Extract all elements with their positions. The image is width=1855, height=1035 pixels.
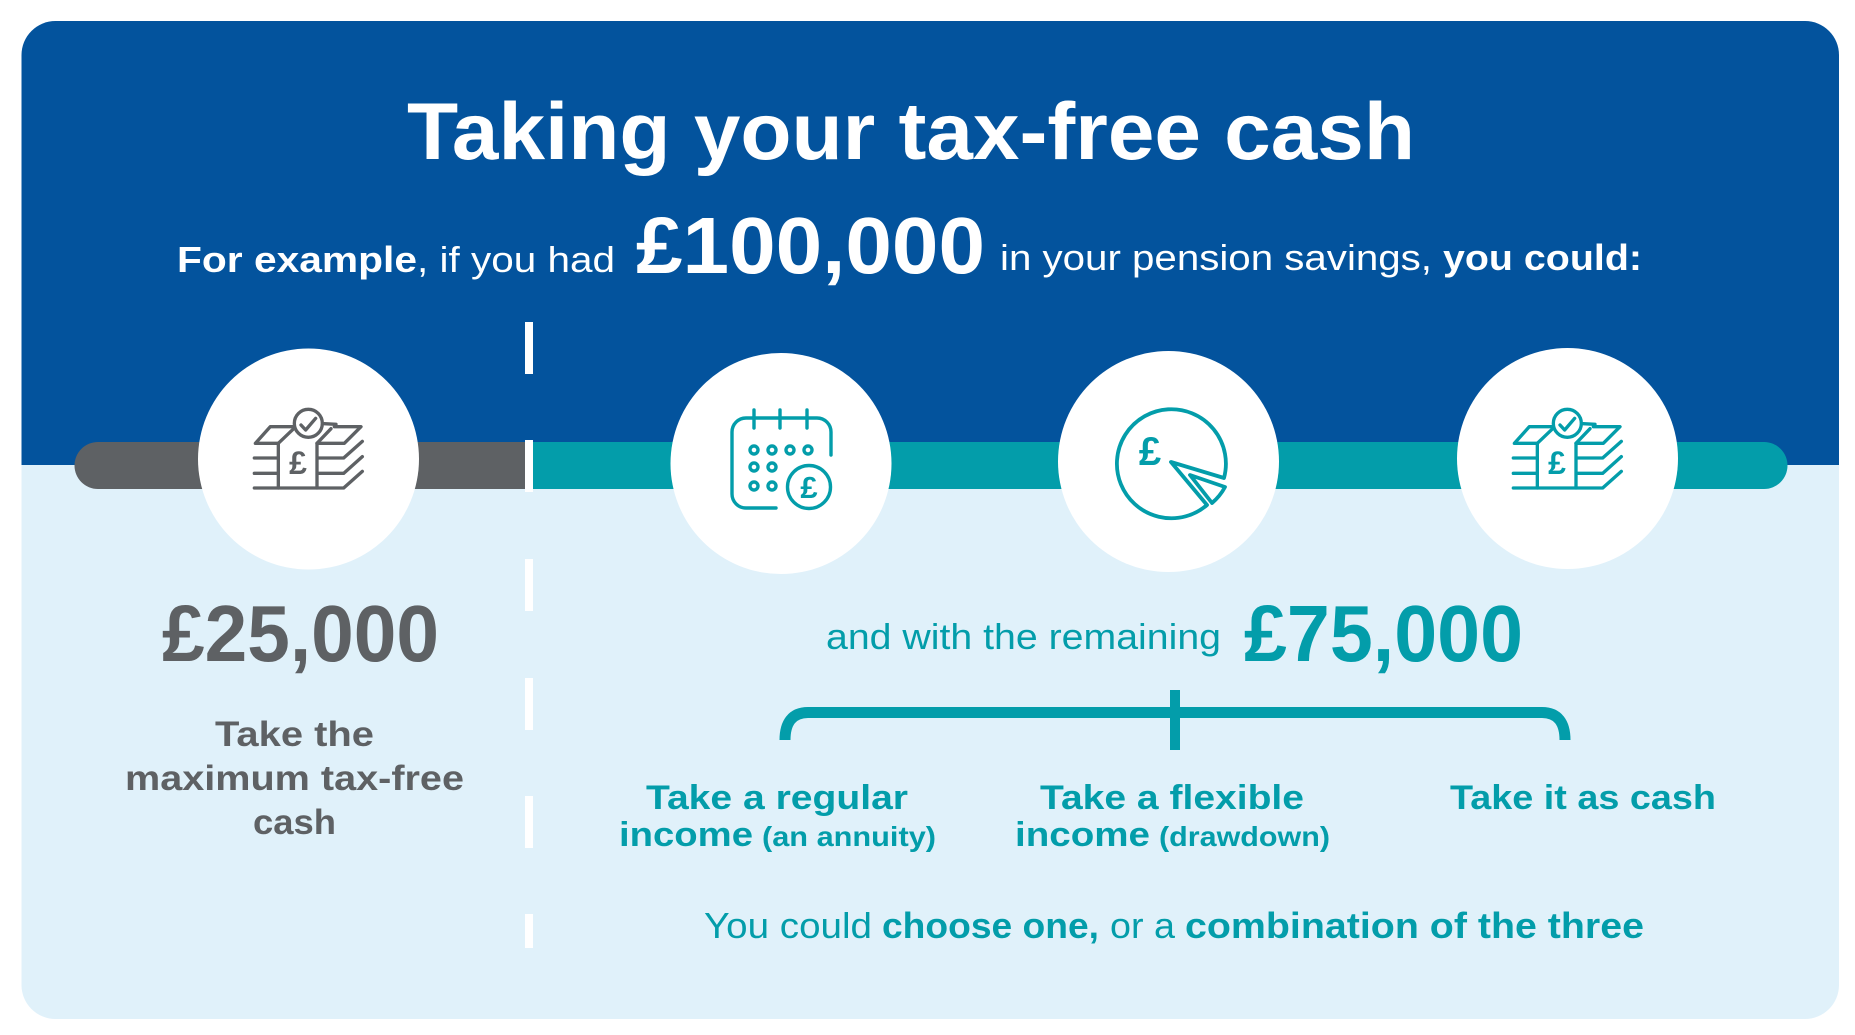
bar: tax-free portion [74, 442, 525, 489]
title: Taking your tax-free cash [407, 87, 1415, 177]
text: take the maximum tax-free cash: maximum tax-free [125, 759, 464, 798]
circle: tax-free cash [198, 348, 419, 570]
text: combination note: or a [1110, 905, 1176, 946]
icon: open box of cash, teal: £ [1548, 445, 1566, 481]
option: regular income [619, 779, 936, 854]
icon: pie chart with pound sign [1117, 409, 1226, 518]
icon: pie chart with pound sign: £ [1139, 430, 1161, 474]
option: regular income: income [619, 816, 753, 854]
text: combination note: You could [704, 905, 872, 946]
text: remaining amount: and with the remaining [826, 616, 1221, 657]
circle: regular income [670, 353, 892, 574]
icon: open box of cash, grey [254, 409, 362, 488]
circle: take as cash [1457, 348, 1678, 569]
subtitle: pension example: £100,000 [636, 201, 985, 290]
icon: open box of cash, grey: £ [289, 445, 307, 481]
option: flexible income: (drawdown) [1159, 821, 1330, 852]
subtitle: pension example: you could: [1443, 237, 1642, 278]
text: take the maximum tax-free cash: Take the [215, 715, 374, 754]
bar: remaining portion [533, 442, 1788, 489]
subtitle: pension example [177, 201, 1642, 290]
text: combination note: combination of the three [1185, 905, 1644, 946]
text: take the maximum tax-free cash: cash [253, 803, 336, 842]
option: take as cash: Take it as cash [1450, 779, 1716, 817]
subtitle: pension example: , if you had [417, 239, 615, 280]
option: flexible income [1015, 779, 1330, 854]
subtitle: pension example: For example [177, 239, 417, 280]
icon: open box of cash, teal [1513, 409, 1621, 488]
bracket [785, 690, 1565, 750]
text: remaining amount [826, 589, 1523, 678]
option: regular income: (an annuity) [762, 821, 936, 852]
amount: £25,000: £25,000 [162, 589, 439, 678]
text: combination note [704, 905, 1644, 946]
icon: calendar with pound coin: £ [800, 470, 818, 505]
dashed divider [525, 322, 533, 948]
option: regular income: Take a regular [646, 779, 908, 817]
subtitle: pension example: in your pension savings, [1000, 237, 1432, 278]
icon: calendar with pound coin [732, 410, 831, 508]
option: flexible income: Take a flexible [1040, 779, 1304, 817]
circle: flexible income [1058, 351, 1279, 572]
text: remaining amount: £75,000 [1244, 589, 1523, 678]
text: take the maximum tax-free cash [125, 715, 464, 842]
text: combination note: choose one, [882, 905, 1099, 946]
option: flexible income: income [1015, 816, 1150, 854]
